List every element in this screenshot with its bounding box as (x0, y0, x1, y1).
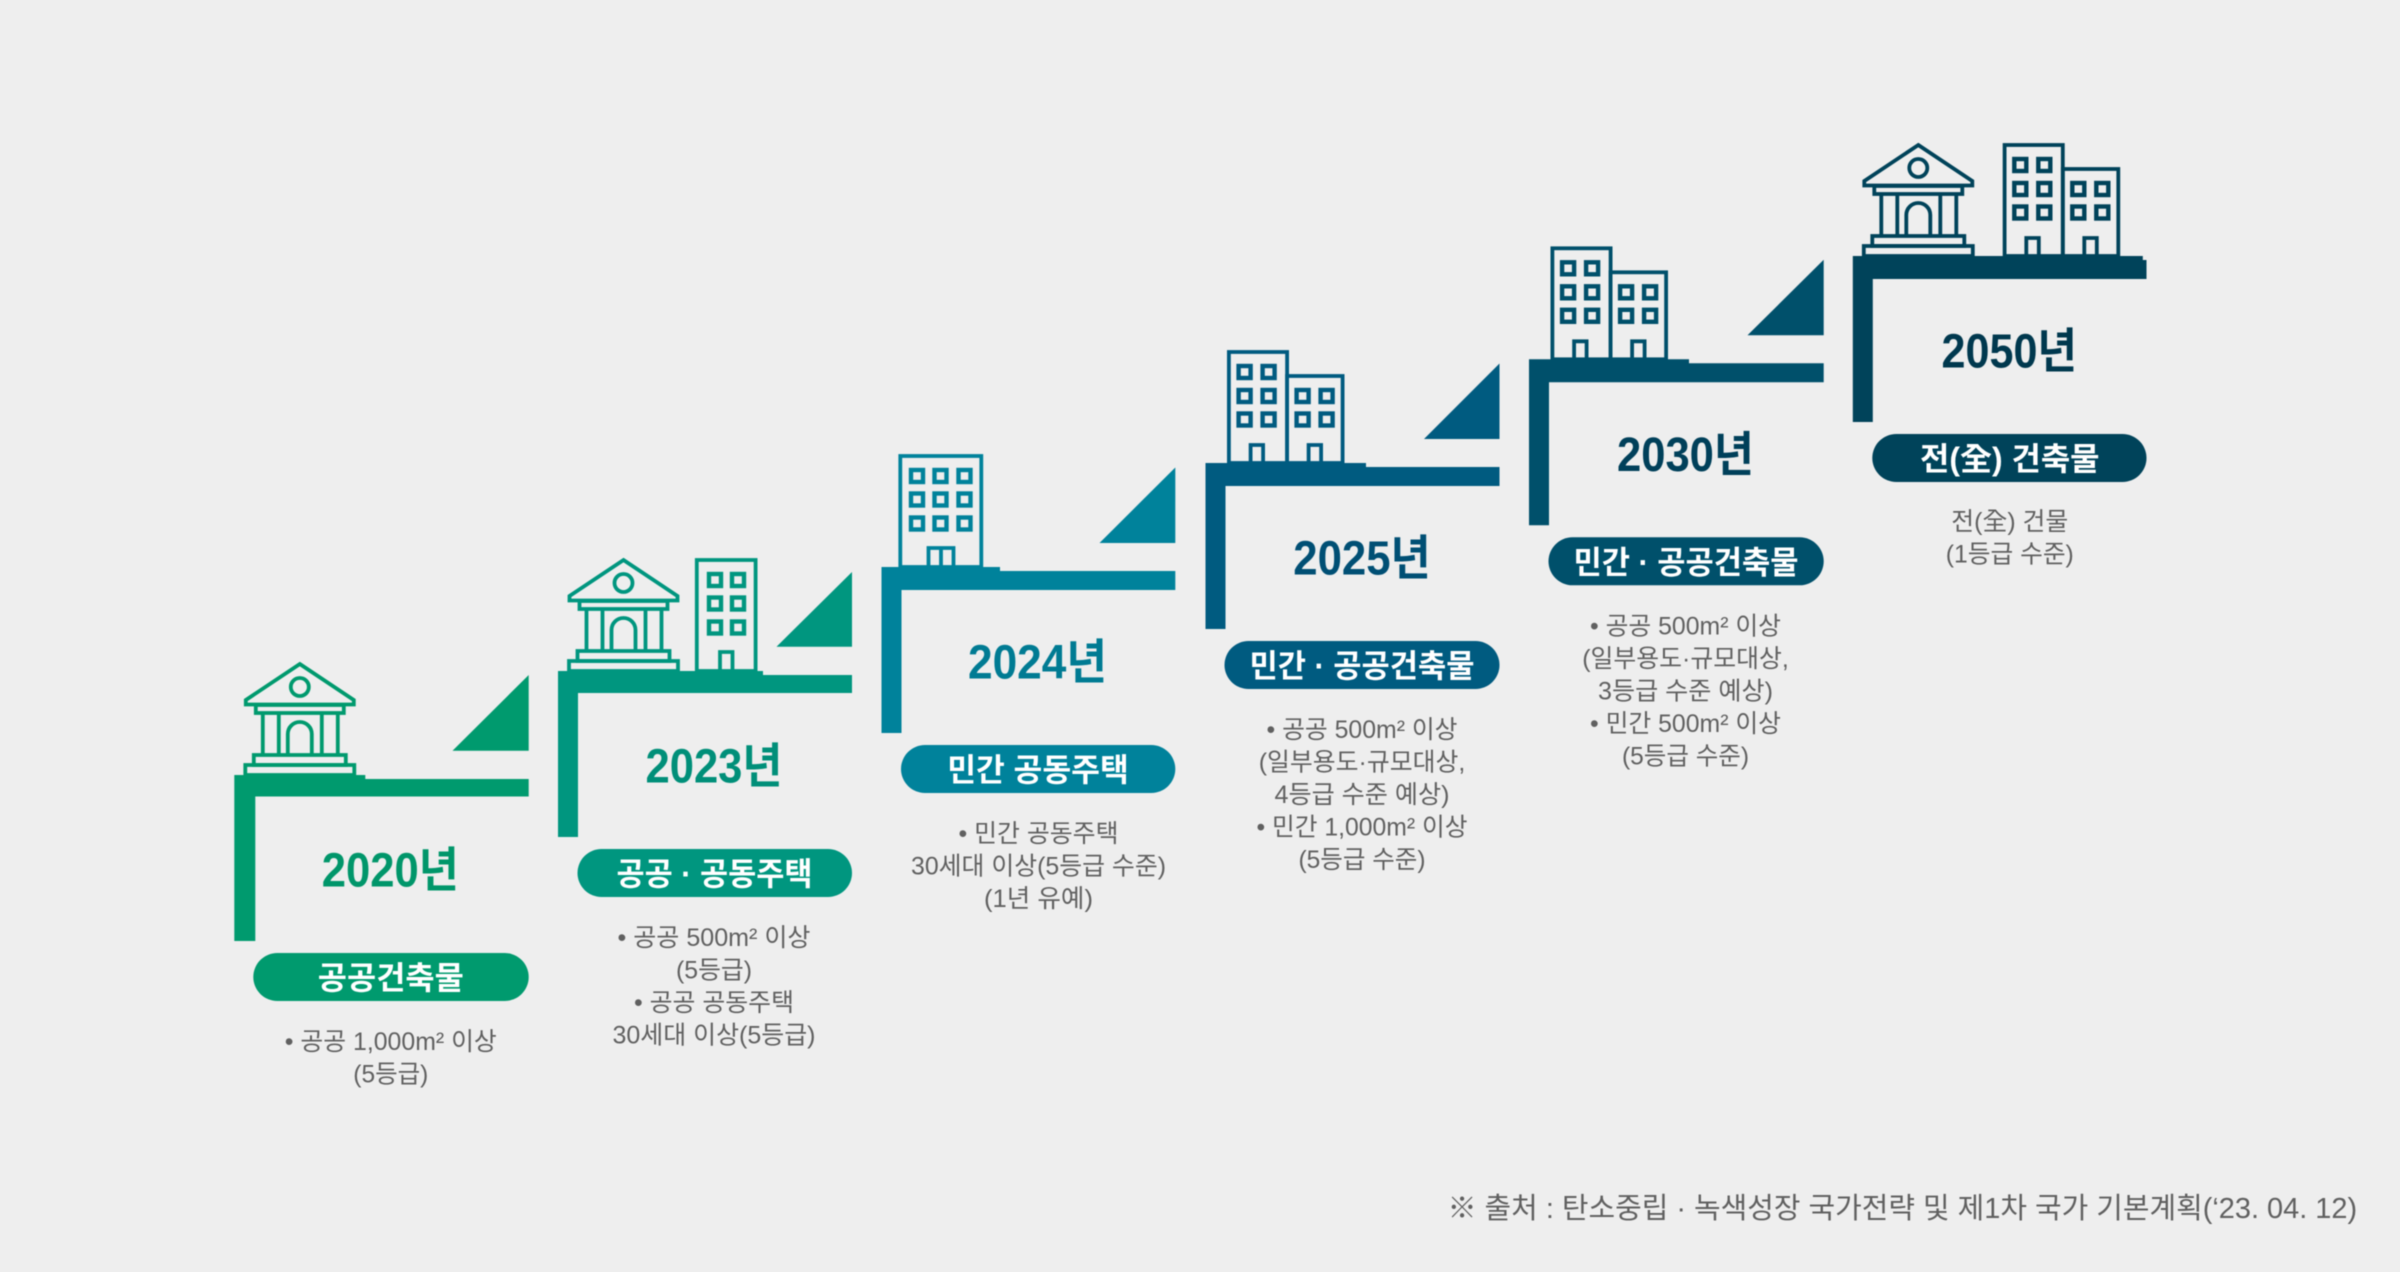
requirement text: • 민간 공동주택 (958, 820, 1118, 848)
step: 2023 (558, 560, 852, 1050)
requirement text: • 민간 500m² 이상 (1590, 710, 1781, 738)
year: 2025년 (1293, 532, 1431, 586)
requirement text: (1년 유예) (984, 885, 1093, 913)
icon: apartments (1552, 248, 1666, 359)
category pill: 민간 · 공공건축물 (1574, 544, 1798, 580)
category pill (1548, 537, 1824, 585)
icon: apartment (697, 560, 756, 671)
triangle arrow (1100, 468, 1175, 543)
year: 2020년 (322, 844, 459, 898)
requirement text (1582, 612, 1789, 770)
icon: apartments (2005, 145, 2118, 256)
icon: apartment (900, 456, 981, 567)
requirement text: 30세대 이상(5등급) (612, 1022, 816, 1050)
step: 2024 (882, 456, 1175, 913)
requirement text: (일부용도·규모대상, (1259, 748, 1465, 776)
requirement text: • 공공 500m² 이상 (1590, 612, 1781, 640)
requirement text: • 공공 500m² 이상 (618, 924, 810, 952)
step: 2025 (1206, 352, 1500, 874)
requirement text: • 공공 1,000m² 이상 (285, 1028, 497, 1056)
stair bracket (882, 567, 1175, 733)
category pill: 민간 공동주택 (947, 752, 1129, 788)
category pill (253, 953, 529, 1001)
category pill (578, 849, 852, 897)
triangle arrow (776, 572, 852, 647)
requirement text: (1등급 수준) (1946, 540, 2074, 568)
triangle arrow (1424, 364, 1500, 439)
stair bracket (1206, 463, 1500, 629)
stair bracket (558, 671, 852, 837)
year: 2030년 (1617, 429, 1754, 482)
requirement text (285, 1028, 497, 1088)
requirement text: • 공공 500m² 이상 (1266, 716, 1458, 744)
requirement text: • 공공 공동주택 (634, 989, 794, 1017)
icon: apartments (1229, 352, 1343, 463)
stair bracket (1529, 359, 1824, 525)
category pill: 공공건축물 (318, 960, 464, 996)
triangle arrow (1748, 260, 1824, 335)
step: 2030 (1529, 248, 1824, 770)
year: 2050년 (1942, 326, 2077, 378)
requirement text: (5등급) (353, 1060, 428, 1088)
category pill: 공공 · 공동주택 (616, 856, 812, 892)
requirement text (1256, 716, 1468, 874)
triangle arrow (452, 675, 529, 751)
requirement text: (5등급 수준) (1622, 742, 1749, 770)
category pill (901, 745, 1175, 793)
icon: public building (569, 560, 678, 671)
category pill: 민간 · 공공건축물 (1250, 648, 1474, 684)
requirement text: (5등급) (676, 956, 752, 984)
stair bracket (1853, 256, 2146, 422)
requirement text (612, 924, 816, 1050)
requirement text: 4등급 수준 예상) (1274, 781, 1450, 809)
step: 2050 (1853, 145, 2146, 568)
requirement text: 30세대 이상(5등급 수준) (911, 852, 1166, 880)
year: 2024년 (968, 636, 1107, 690)
year: 2023년 (646, 740, 782, 794)
category pill (1872, 434, 2146, 482)
icon: public building (245, 664, 354, 775)
requirement text (1946, 508, 2074, 568)
icon: public building (1864, 145, 1973, 256)
source note: ※ 출처 : 탄소중립 · 녹색성장 국가전략 및 제1차 국가 기본계획(‘23. 04. 12) (1448, 1192, 2357, 1225)
requirement text (911, 820, 1166, 913)
requirement text: • 민간 1,000m² 이상 (1256, 814, 1468, 842)
requirement text: (5등급 수준) (1298, 846, 1426, 874)
category pill (1224, 641, 1500, 689)
requirement text: 3등급 수준 예상) (1598, 677, 1773, 705)
stair bracket (234, 775, 529, 941)
step: 2020 (234, 664, 529, 1088)
requirement text: 전(全) 건물 (1951, 508, 2068, 536)
category pill: 전(全) 건축물 (1920, 441, 2100, 477)
requirement text: (일부용도·규모대상, (1582, 645, 1789, 673)
